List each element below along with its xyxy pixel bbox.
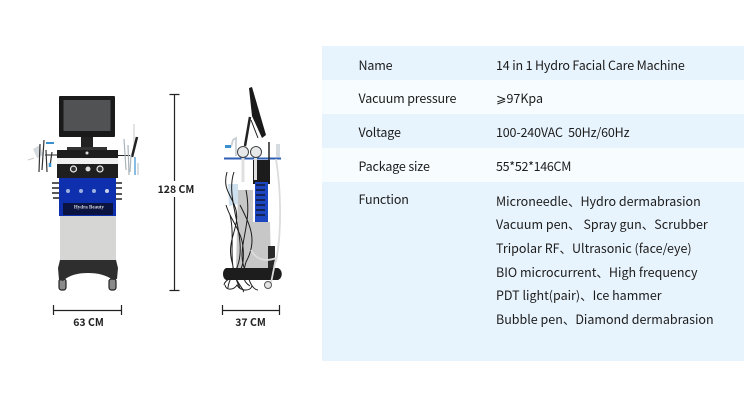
right handpieces [118,124,138,175]
dimension: width 63 CM: 63 CM [73,315,104,330]
row: package size: Package size [358,156,430,175]
row: package size [322,148,744,182]
row: function: Tripolar RF、Ultrasonic (face/eye) [496,238,692,257]
row: function: PDT light(pair)、Ice hammer [496,285,662,304]
dimension: height 128 CM [156,94,196,291]
row: vacuum pressure: ⩾97Kpa [496,88,543,107]
dimension: depth 37 CM: 37 CM [235,315,266,330]
base and wheels [58,260,118,290]
row: voltage: 100-240VAC 50Hz/60Hz [496,122,629,141]
front view machine [28,96,138,290]
row: name: 14 in 1 Hydro Facial Care Machine [496,55,685,74]
row: function: Function [358,189,409,208]
row: function: Vacuum pen、 Spray gun、Scrubber [496,214,708,233]
control head [57,147,118,178]
row: function: Bubble pen、Diamond dermabrasion [496,309,714,328]
dimension: width 63 CM [54,305,122,330]
row: name [322,46,744,80]
row: vacuum pressure: Vacuum pressure [358,88,456,107]
bottle and cables [224,159,280,292]
blue panel [52,178,122,216]
side body [223,182,282,280]
side view machine [223,87,282,292]
row: vacuum pressure [322,80,744,114]
row: voltage [322,114,744,148]
side console [224,138,281,184]
row: voltage: Voltage [358,122,401,141]
row: function: BIO microcurrent、High frequency [496,262,697,281]
row: package size: 55*52*146CM [496,156,571,175]
row: name: Name [358,55,392,74]
side monitor [245,87,266,146]
panel: specification table [322,46,744,361]
row: function [322,182,744,361]
left handpieces [28,140,57,172]
row: function: Microneedle、Hydro dermabrasion [496,191,701,210]
dimension: depth 37 CM [222,305,280,330]
dimension: height 128 CM: 128 CM [158,182,194,197]
blue panel: Hydra Beauty [74,206,105,210]
cabinet [60,216,116,261]
monitor [59,96,115,149]
illustration: machines and dimensions [28,87,282,330]
